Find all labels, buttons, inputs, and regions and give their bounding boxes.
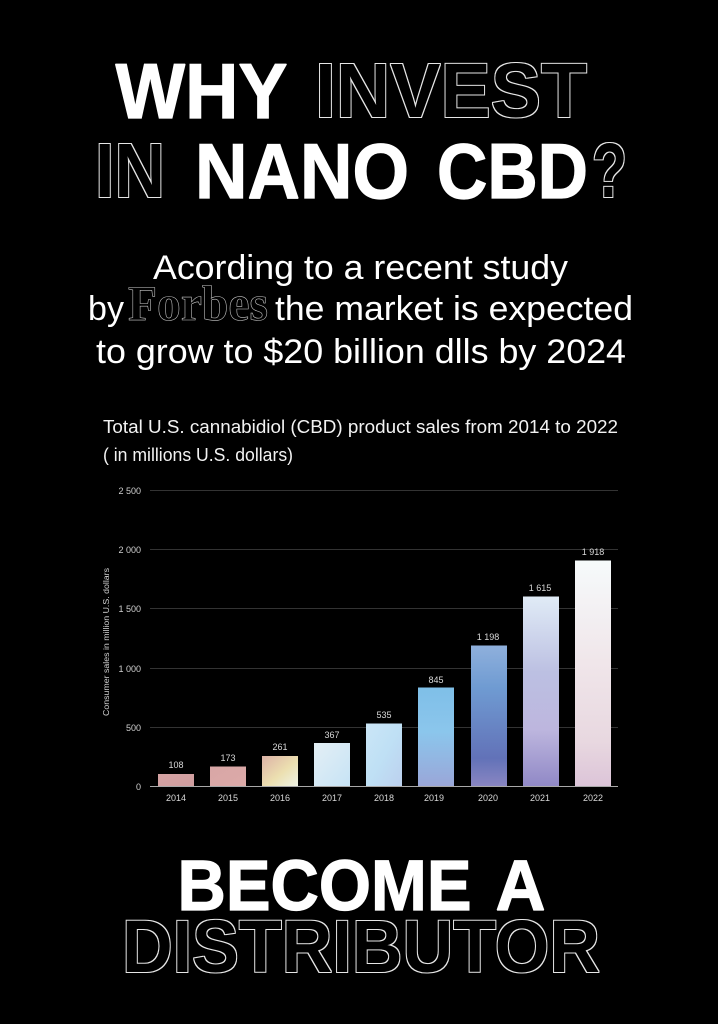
value labels: 1 615 (529, 583, 551, 593)
chart title: Total U.S. cannabidiol (CBD) product sales from 2014 to 2022 (103, 417, 618, 437)
y axis labels: 1 500 (118, 604, 141, 614)
value labels: 845 (428, 675, 444, 685)
subheading (88, 249, 633, 371)
title: ? (592, 128, 627, 214)
y axis title: Consumer sales in million U.S. dollars (101, 568, 111, 716)
value labels: 1 198 (477, 632, 499, 642)
x axis labels: 2022 (583, 793, 603, 803)
value labels: 261 (272, 742, 288, 752)
y axis labels: 2 500 (118, 486, 141, 496)
title: WHY (116, 47, 288, 135)
x axis labels (166, 793, 603, 803)
y axis labels: 0 (136, 782, 141, 792)
bars (158, 560, 611, 786)
x axis labels: 2020 (478, 793, 498, 803)
y axis labels: 2 000 (118, 545, 141, 555)
title: CBD (437, 127, 588, 215)
title: INVEST (315, 48, 587, 134)
bar chart (101, 486, 618, 803)
y axis labels: 500 (126, 723, 141, 733)
title: NANO (195, 127, 409, 215)
x axis labels: 2015 (218, 793, 238, 803)
value labels: 535 (376, 710, 392, 720)
value labels (168, 547, 604, 770)
subheading: Forbes (128, 275, 268, 331)
y axis labels: 1 000 (118, 664, 141, 674)
value labels: 108 (168, 760, 184, 770)
call to action: DISTRIBUTOR (122, 905, 600, 988)
value labels: 1 918 (582, 547, 604, 557)
x axis labels: 2016 (270, 793, 290, 803)
title (95, 47, 627, 215)
call to action: BECOME (178, 847, 472, 926)
x axis labels: 2021 (530, 793, 550, 803)
subheading: the market is expected (275, 290, 633, 328)
chart title: ( in millions U.S. dollars) (103, 445, 293, 465)
x axis labels: 2018 (374, 793, 394, 803)
x axis labels: 2014 (166, 793, 186, 803)
value labels: 173 (220, 753, 236, 763)
subheading: Acording to a recent study (153, 249, 568, 287)
title: IN (95, 128, 165, 214)
call to action (122, 847, 600, 988)
value labels: 367 (324, 730, 340, 740)
y axis labels (118, 486, 141, 792)
subheading: by (88, 290, 124, 328)
chart title (103, 417, 618, 465)
x axis labels: 2019 (424, 793, 444, 803)
x axis labels: 2017 (322, 793, 342, 803)
subheading: to grow to $20 billion dlls by 2024 (96, 333, 626, 371)
call to action: A (496, 847, 546, 926)
